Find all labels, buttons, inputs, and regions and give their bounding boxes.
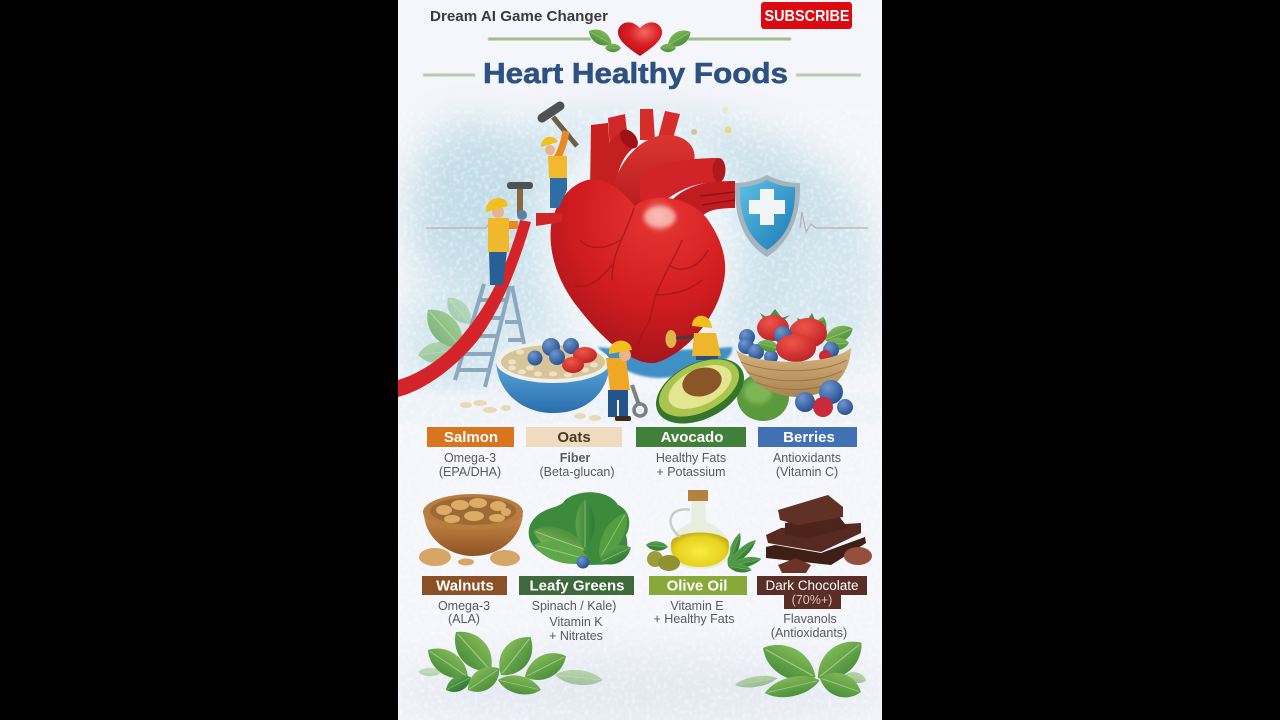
avocado bbox=[645, 345, 789, 437]
food label: Salmon: Salmon bbox=[444, 429, 498, 446]
food label: Olive Oil bbox=[649, 576, 747, 626]
face bbox=[492, 208, 504, 218]
pulse line bbox=[426, 212, 868, 232]
hammer bbox=[507, 182, 533, 214]
walnut bowl bbox=[419, 494, 523, 566]
background mist bbox=[380, 110, 900, 720]
food label: Oats: Fiber bbox=[560, 451, 590, 465]
food label: Berries: (Vitamin C) bbox=[776, 465, 838, 479]
hard hat bbox=[692, 316, 712, 328]
sparkles bbox=[691, 107, 732, 135]
channel name: Dream AI Game Changer bbox=[430, 8, 608, 25]
legs bbox=[550, 178, 567, 208]
food label: Dark Chocolate bbox=[757, 576, 867, 640]
face bbox=[545, 145, 555, 155]
left green leaves bbox=[418, 298, 471, 363]
avocado half bbox=[645, 345, 755, 437]
vessels bbox=[590, 109, 735, 224]
wrench bbox=[632, 385, 639, 405]
food label: Leafy Greens: + Nitrates bbox=[549, 629, 603, 643]
whole avocado bbox=[737, 373, 789, 421]
food label: Leafy Greens: Vitamin K bbox=[549, 615, 603, 629]
olive oil bottle bbox=[646, 490, 762, 574]
title: Heart Healthy Foods bbox=[483, 58, 788, 90]
vest bbox=[692, 333, 721, 356]
sponge bbox=[666, 330, 676, 348]
food label: Berries: Berries bbox=[783, 429, 835, 446]
bowl berries bbox=[528, 338, 597, 373]
food label: Walnuts: (ALA) bbox=[448, 612, 480, 626]
legs bbox=[489, 251, 507, 285]
food label: Dark Chocolate: (70%+) bbox=[792, 593, 832, 607]
food label: Walnuts bbox=[422, 576, 507, 626]
food label: Leafy Greens bbox=[519, 576, 634, 643]
food label: Olive Oil: Olive Oil bbox=[667, 578, 727, 594]
arm bbox=[676, 336, 700, 338]
food label: Oats: Oats bbox=[557, 429, 591, 446]
panel background bbox=[398, 0, 882, 720]
hard hat bbox=[609, 341, 632, 354]
food label: Dark Chocolate: Dark Chocolate bbox=[765, 578, 859, 593]
oats bbox=[508, 350, 598, 378]
loose walnuts bbox=[419, 548, 520, 566]
leafy greens bbox=[529, 492, 634, 570]
bottom-right leaves bbox=[734, 632, 870, 703]
worker with raised hammer bbox=[541, 106, 577, 208]
walnuts bbox=[436, 498, 511, 523]
title bbox=[422, 62, 862, 90]
hard hat bbox=[486, 198, 508, 212]
boots bbox=[615, 416, 631, 421]
food label: Dark Chocolate: Flavanols bbox=[783, 612, 837, 626]
legs bbox=[696, 352, 718, 360]
shield icon bbox=[735, 175, 800, 257]
vest bbox=[548, 156, 567, 178]
vest bbox=[606, 358, 630, 390]
food label: Berries bbox=[758, 427, 857, 479]
food label: Salmon bbox=[427, 427, 514, 479]
top heart ornament bbox=[488, 22, 791, 56]
basket weave bbox=[741, 360, 847, 390]
bottom-left leaves bbox=[418, 623, 604, 699]
food label: Avocado bbox=[636, 427, 746, 479]
food label: Leafy Greens: Spinach / Kale) bbox=[532, 599, 616, 613]
food label: Avocado: Avocado bbox=[661, 429, 723, 446]
legs bbox=[608, 390, 628, 417]
heart highlight bbox=[644, 206, 676, 228]
food label: Avocado: + Potassium bbox=[656, 465, 726, 479]
food label: Olive Oil: + Healthy Fats bbox=[654, 612, 734, 626]
ladder bbox=[455, 284, 524, 387]
food label: Dark Chocolate: (Antioxidants) bbox=[771, 626, 847, 640]
food label: Avocado: Healthy Fats bbox=[656, 451, 726, 465]
loose oats bbox=[460, 400, 601, 421]
worker with wrench bbox=[606, 341, 646, 421]
basket bbox=[736, 348, 851, 397]
hard hat bbox=[541, 137, 558, 147]
arm bbox=[509, 221, 518, 229]
tube to heart bbox=[536, 213, 562, 226]
subscribe button: SUBSCRIBE bbox=[764, 8, 850, 25]
food label: Salmon: (EPA/DHA) bbox=[439, 465, 501, 479]
food label: Salmon: Omega-3 bbox=[444, 451, 496, 465]
berries basket bbox=[736, 309, 856, 417]
main heart illustration bbox=[551, 109, 735, 363]
blue puddle bbox=[598, 347, 732, 378]
dark chocolate bbox=[766, 495, 872, 573]
food label: Oats: (Beta-glucan) bbox=[539, 465, 615, 479]
food label: Olive Oil: Vitamin E bbox=[670, 599, 724, 613]
panel: infographic poster bbox=[380, 0, 900, 720]
oats bowl bbox=[460, 338, 610, 421]
food label: Oats bbox=[526, 427, 622, 479]
face bbox=[619, 349, 631, 361]
food label: Walnuts: Walnuts bbox=[436, 578, 494, 594]
food label: Leafy Greens: Leafy Greens bbox=[529, 578, 625, 594]
coronary veins bbox=[575, 208, 708, 345]
heart body bbox=[551, 179, 725, 363]
vest bbox=[488, 218, 509, 252]
food label: Berries: Antioxidants bbox=[773, 451, 841, 465]
arm bbox=[556, 131, 566, 160]
loose berries bbox=[795, 380, 853, 417]
strawberries and berries bbox=[738, 309, 856, 364]
food label: Walnuts: Omega-3 bbox=[438, 599, 490, 613]
hammer bbox=[542, 106, 577, 146]
subscribe button bbox=[761, 2, 852, 29]
worker on ladder bbox=[486, 182, 533, 285]
worker polishing heart bbox=[666, 316, 721, 360]
red tube bbox=[398, 220, 531, 397]
